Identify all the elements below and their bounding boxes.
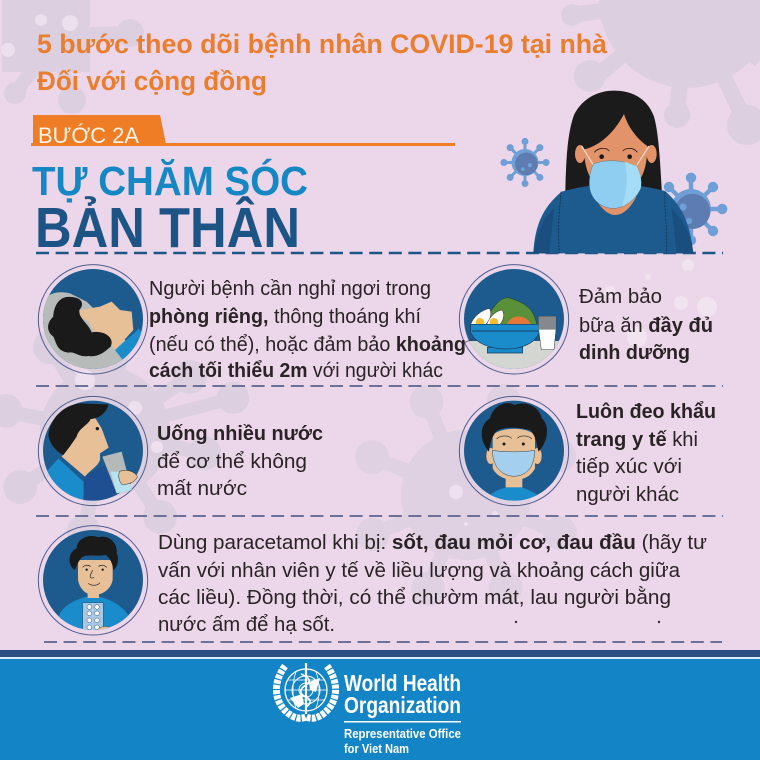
divider [36, 252, 723, 254]
WHO wordmark: Organization [344, 692, 461, 718]
background virus: middle left [0, 292, 249, 572]
woman wearing a mask [533, 91, 693, 253]
mask [492, 450, 535, 476]
text: nutrition: dinh dưỡng [579, 341, 690, 364]
text: drink water: để cơ thể không [157, 450, 307, 473]
background virus: top right [561, 0, 760, 145]
WHO wordmark: Representative Office [344, 726, 461, 741]
hair [70, 536, 118, 570]
divider [36, 385, 723, 387]
hair [48, 403, 108, 455]
text: rest in a private room: Người bệnh cần nghỉ ngơi trong [149, 277, 431, 300]
eyes [594, 148, 637, 152]
text: wear a mask: người khác [576, 483, 679, 506]
text: wear a mask: trang y tế khi [576, 428, 698, 451]
WHO wordmark: for Viet Nam [344, 741, 409, 756]
title [37, 29, 608, 96]
head [493, 429, 535, 480]
text: drink water [157, 422, 323, 500]
text: rest in a private room: cách tối thiểu 2m với người khác [149, 359, 443, 382]
neck [593, 193, 637, 215]
divider [44, 641, 722, 643]
background virus: right small dots [604, 259, 717, 347]
WHO wordmark: World Health [344, 670, 461, 696]
text: rest in a private room [149, 277, 466, 382]
icon: person wearing a mask [459, 396, 569, 506]
sweater [533, 185, 693, 253]
glass [102, 452, 132, 493]
text: wear a mask: Luôn đeo khẩu [576, 400, 716, 423]
title: 5 bước theo dõi bệnh nhân COVID-19 tại nhà [37, 29, 608, 59]
background virus: center [312, 341, 620, 649]
icon: resting patient [38, 265, 150, 375]
text: drink water: Uống nhiều nước [157, 422, 323, 445]
step label: Bước 2A [31, 115, 455, 148]
text: nutrition [579, 285, 713, 364]
hair [482, 403, 547, 452]
WHO emblem [276, 663, 336, 718]
face [62, 418, 109, 477]
small virus [500, 138, 550, 187]
text: nutrition: bữa ăn đầy đủ [579, 314, 713, 337]
icon: man with paracetamol [38, 526, 148, 635]
text: rest in a private room: (nếu có thể), hoặc đảm bảo khoảng [149, 333, 466, 356]
ears [575, 145, 585, 163]
heading [32, 158, 308, 260]
face [584, 114, 647, 200]
text: paracetamol: các liều). Đồng thời, có thể chườm mát, lau người bằng [158, 586, 671, 609]
head [78, 560, 113, 595]
mask [582, 146, 649, 165]
heading: BẢN THÂN [35, 195, 300, 260]
right ear [647, 145, 657, 163]
ears [486, 448, 495, 464]
right ear [533, 448, 542, 464]
icon: healthy meal [459, 265, 569, 375]
text: nutrition: Đảm bảo [579, 285, 662, 308]
step label: Bước 2A: BƯỚC 2A [38, 123, 139, 148]
text: paracetamol: nước ấm để hạ sốt. [158, 613, 335, 636]
text: rest in a private room: phòng riêng, thông thoáng khí [149, 305, 421, 328]
divider [36, 515, 723, 517]
text: wear a mask: tiếp xúc với [576, 455, 682, 478]
hair [565, 91, 662, 193]
title: Đối với cộng đồng [37, 66, 267, 96]
text: wear a mask [576, 400, 716, 506]
text: paracetamol: Dùng paracetamol khi bị: sốt, đau mỏi cơ, đau đầu (hãy tư [158, 531, 707, 554]
text: drink water: mất nước [157, 477, 247, 500]
hand [119, 470, 137, 484]
background virus: top left [1, 0, 144, 114]
heading: TỰ CHĂM SÓC [32, 158, 308, 204]
icon: drinking water [38, 396, 148, 506]
footer band [0, 650, 760, 760]
text: paracetamol [158, 531, 707, 636]
WHO wordmark [344, 670, 461, 756]
text: paracetamol: vấn với nhân viên y tế về liều lượng và khoảng cách giữa [158, 559, 681, 582]
large virus [655, 173, 727, 245]
